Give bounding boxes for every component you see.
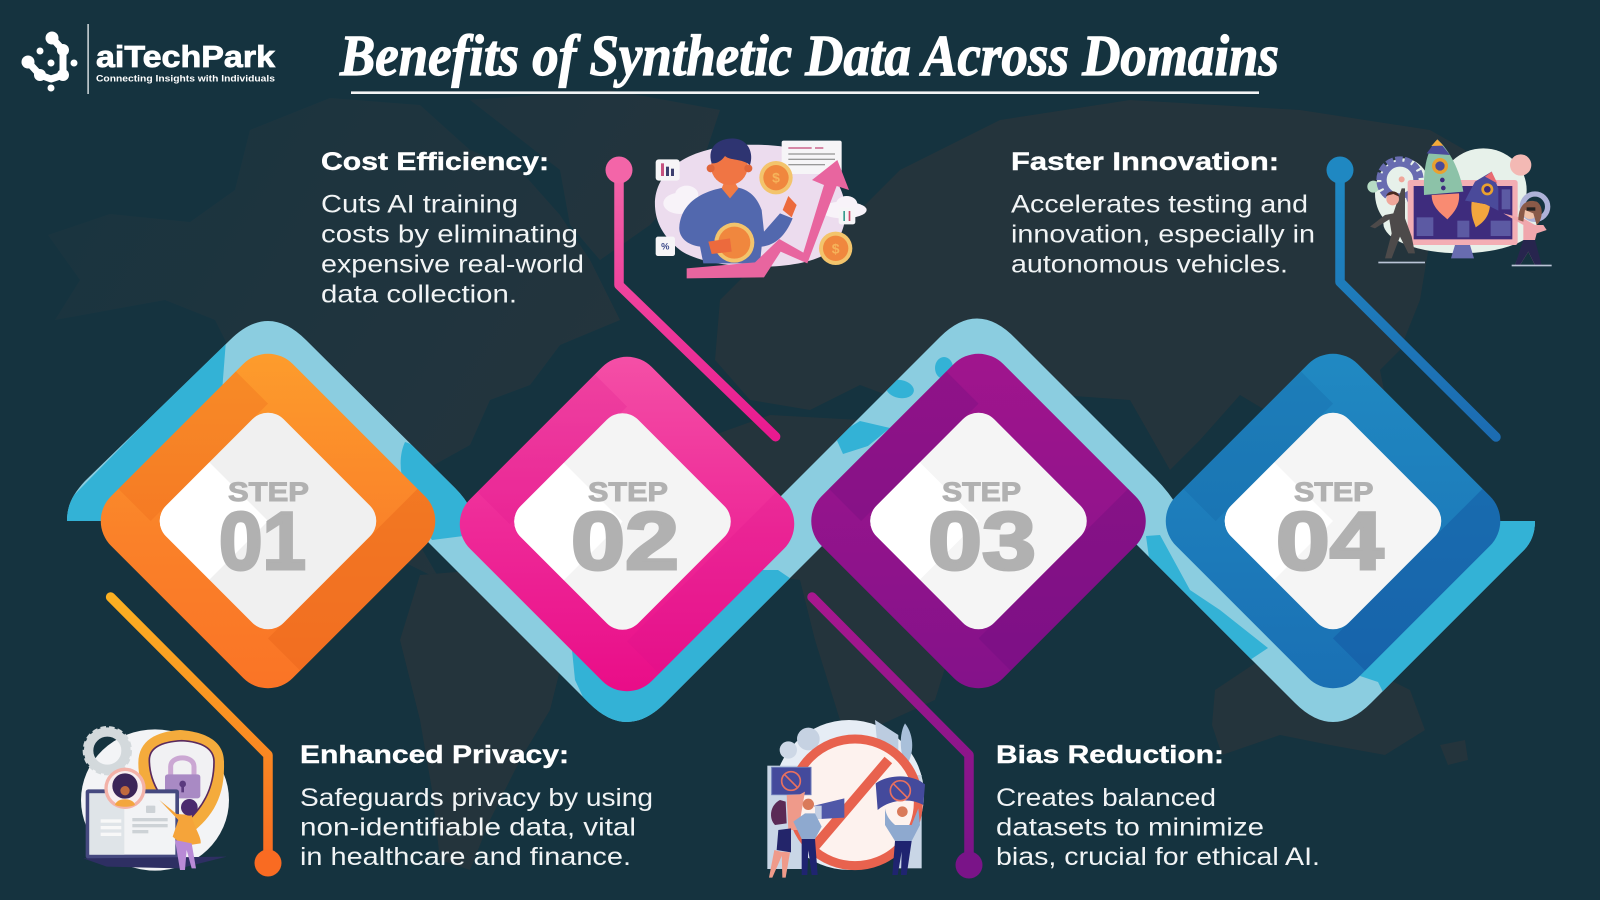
body: costs by eliminating	[321, 220, 578, 248]
body	[300, 784, 653, 871]
body: autonomous vehicles.	[1011, 250, 1288, 278]
icon: cost efficiency person with coins: %	[661, 241, 670, 251]
logo tagline: Connecting Insights with Individuals	[96, 74, 275, 84]
title underline	[351, 91, 1259, 94]
step label: STEP	[228, 477, 309, 507]
body	[996, 784, 1320, 871]
step 01	[100, 354, 436, 688]
coin symbol: $	[772, 170, 780, 186]
text block: bias reduction	[996, 741, 1320, 871]
icon: bias reduction protest	[767, 720, 925, 878]
text block: faster innovation	[1011, 148, 1315, 278]
logo mark	[22, 32, 78, 92]
world map backdrop	[48, 90, 1500, 870]
step 02	[460, 356, 794, 692]
body: Cuts AI training	[321, 191, 518, 219]
step 03	[811, 354, 1146, 688]
orange diamond	[100, 354, 436, 688]
step number: 04	[1276, 496, 1384, 587]
body: non-identifiable data, vital	[300, 814, 636, 842]
purple diamond	[811, 354, 1146, 688]
body: data collection.	[321, 280, 517, 308]
coin symbol: $	[832, 240, 840, 256]
body: bias, crucial for ethical AI.	[996, 843, 1320, 871]
heading: Faster Innovation:	[1011, 148, 1279, 176]
white centre	[160, 412, 376, 630]
zigzag ribbon behind the steps	[67, 318, 1535, 722]
white centre	[514, 413, 731, 630]
step number: 02	[571, 496, 679, 587]
heading: Cost Efficiency:	[321, 148, 549, 176]
connector: orange	[111, 597, 281, 876]
logo wordmark: aiTechPark	[96, 39, 276, 74]
body	[1011, 190, 1315, 278]
icon: cost efficiency person with coins	[655, 139, 867, 278]
text block: enhanced privacy	[300, 741, 653, 871]
white centre	[870, 412, 1087, 630]
body: expensive real-world	[321, 250, 584, 278]
heading: Bias Reduction:	[996, 741, 1224, 769]
white centre	[1224, 412, 1442, 630]
connector: blue	[1326, 156, 1496, 437]
icon: faster innovation rockets	[1367, 139, 1552, 266]
body: Accelerates testing and	[1011, 190, 1308, 218]
pink diamond	[460, 356, 794, 692]
body: datasets to minimize	[996, 814, 1264, 842]
step label: STEP	[942, 477, 1021, 507]
step 04	[1166, 354, 1500, 688]
logo	[22, 24, 276, 94]
heading: Enhanced Privacy:	[300, 741, 569, 769]
step label: STEP	[1294, 477, 1374, 507]
title: Benefits of Synthetic Data Across Domains	[339, 23, 1279, 88]
connector: purple	[812, 597, 982, 878]
logo divider	[87, 24, 89, 94]
blue diamond	[1166, 354, 1500, 688]
body: in healthcare and finance.	[300, 843, 631, 871]
step number: 03	[928, 496, 1036, 587]
step number: 01	[219, 496, 306, 587]
connector: pink	[606, 156, 776, 437]
step label: STEP	[588, 477, 668, 507]
body: innovation, especially in	[1011, 220, 1315, 248]
body: Safeguards privacy by using	[300, 784, 653, 812]
body: Creates balanced	[996, 784, 1216, 812]
icon: enhanced privacy shield and laptop	[81, 728, 229, 871]
text block: cost efficiency	[321, 148, 584, 308]
body	[321, 191, 584, 308]
